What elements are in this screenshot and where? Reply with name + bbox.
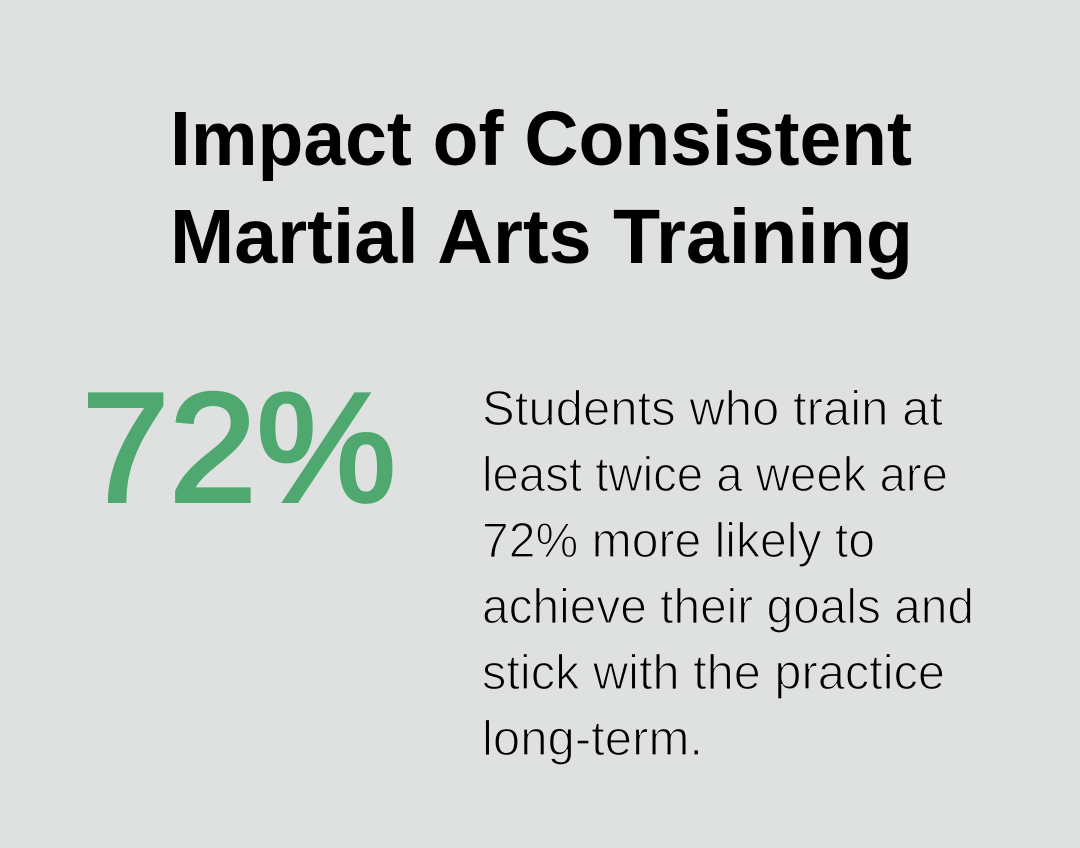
title: Martial Arts Training [170,194,913,280]
description text: stick with the practice [482,645,945,700]
big stat: 72%: 72% [82,361,396,534]
title: Impact of Consistent [170,96,912,182]
description text: long-term. [482,711,703,766]
description text: least twice a week are [482,447,948,502]
description text: achieve their goals and [482,579,974,634]
description text: 72% more likely to [482,513,875,568]
title [170,96,913,280]
description text [482,381,974,766]
description text: Students who train at [482,381,943,436]
